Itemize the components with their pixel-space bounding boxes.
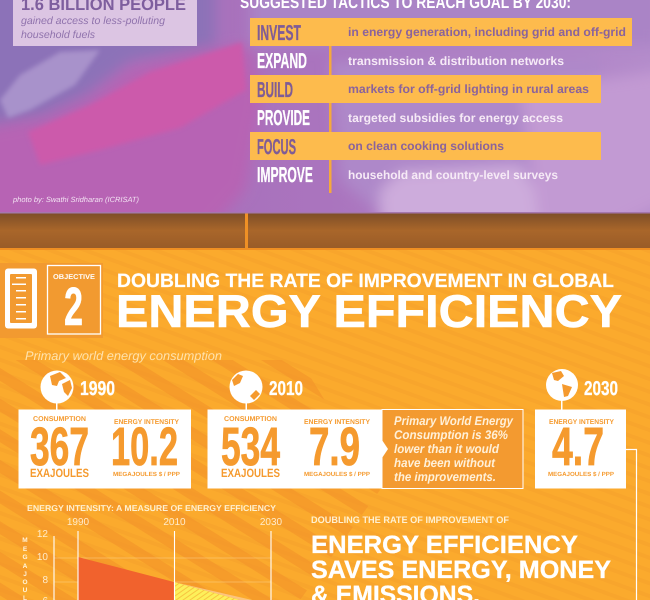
heading: objective title: ENERGY EFFICIENCY bbox=[116, 285, 622, 337]
tactic: improve: household and country-level surveys bbox=[348, 168, 558, 182]
panel: 2030 bbox=[535, 369, 626, 488]
panel: 1.6 billion people callout bbox=[13, 0, 197, 46]
callout: 36 percent lower: Primary World Energy bbox=[394, 414, 514, 428]
tactic: build: BUILD bbox=[257, 78, 293, 102]
stat: consumption 367: 367 bbox=[30, 417, 89, 477]
y axis title: E bbox=[23, 546, 28, 553]
tactic: expand: transmission & distribution networks bbox=[348, 54, 564, 68]
heading: objective title: DOUBLING THE RATE OF IMPROVEMENT IN GLOBAL bbox=[117, 270, 614, 292]
tactic: focus: FOCUS bbox=[257, 135, 296, 159]
x axis years bbox=[67, 517, 283, 528]
panel: brown wood band bbox=[0, 212, 650, 248]
stat: consumption 534 bbox=[221, 416, 280, 480]
panel: objective badge bbox=[0, 263, 103, 338]
icon: globe 2030 bbox=[546, 369, 578, 410]
tactic: invest: in energy generation, including grid and off-grid bbox=[348, 25, 626, 39]
objective number frame bbox=[48, 266, 100, 337]
tactic: build: markets for off-grid lighting in rural areas bbox=[348, 82, 589, 96]
objective number frame: 2 bbox=[64, 277, 83, 337]
text block: efficiency saves: SAVES ENERGY, MONEY bbox=[311, 556, 611, 584]
y axis title: G bbox=[22, 554, 28, 561]
tactic: provide: PROVIDE bbox=[257, 106, 310, 130]
stat: consumption 367 bbox=[30, 416, 89, 480]
callout: 36 percent lower: Consumption is 36% bbox=[394, 428, 508, 442]
stat: intensity 4.7: ENERGY INTENSITY bbox=[549, 419, 614, 426]
icon: globe 2010 bbox=[230, 370, 262, 410]
callout: 36 percent lower: the improvements. bbox=[394, 470, 496, 484]
y axis ticks bbox=[37, 529, 48, 600]
text block: efficiency saves bbox=[311, 515, 611, 600]
y axis ticks: 8 bbox=[42, 575, 48, 586]
panel: 2010 bbox=[208, 370, 382, 488]
tactic: focus bbox=[250, 132, 601, 160]
chart title: ENERGY INTENSITY: A MEASURE OF ENERGY EFFICIENCY bbox=[27, 503, 276, 513]
tactic: expand bbox=[257, 49, 564, 73]
stat: consumption 367: EXAJOULES bbox=[30, 466, 89, 480]
y axis title: J bbox=[23, 571, 27, 578]
tactic: build bbox=[250, 75, 601, 103]
objective number frame: OBJECTIVE bbox=[53, 274, 95, 281]
panel: orange solar background bbox=[0, 248, 650, 600]
panel: 1990 bbox=[18, 370, 191, 488]
y axis title: A bbox=[23, 563, 28, 570]
area: projected intensity bbox=[174, 582, 240, 600]
stat: intensity 7.9: 7.9 bbox=[309, 417, 360, 477]
icon: globe 1990 bbox=[40, 370, 74, 410]
photo credit: photo by: Swathi Sridharan (ICRISAT) bbox=[12, 195, 139, 204]
panel: 2010: 2010 bbox=[269, 378, 303, 400]
tactic: focus: on clean cooking solutions bbox=[348, 139, 504, 153]
stat: intensity 7.9: ENERGY INTENSITY bbox=[304, 419, 370, 426]
stat: intensity 10.2 bbox=[111, 417, 180, 478]
tactic: invest: INVEST bbox=[257, 21, 301, 45]
stat: intensity 10.2: 10.2 bbox=[111, 417, 178, 477]
tactic: improve: IMPROVE bbox=[257, 163, 313, 187]
chart: energy intensity bbox=[22, 503, 283, 600]
panel: 2030: 2030 bbox=[584, 378, 618, 400]
x axis years: 2030 bbox=[260, 517, 283, 528]
tactic: provide bbox=[257, 106, 563, 130]
stat: consumption 534: 534 bbox=[221, 417, 280, 477]
y axis ticks: 12 bbox=[37, 529, 48, 540]
tactic: invest bbox=[250, 18, 632, 46]
y axis ticks: 10 bbox=[37, 552, 48, 563]
stat: intensity 4.7: 4.7 bbox=[552, 417, 604, 477]
x axis years: 1990 bbox=[67, 517, 90, 528]
callout: 36 percent lower bbox=[382, 410, 523, 488]
tactic: expand: EXPAND bbox=[257, 49, 307, 73]
panel: 1.6 billion people callout: gained access to less-polluting bbox=[21, 15, 165, 27]
y axis title: O bbox=[22, 579, 28, 586]
stat: consumption 534: EXAJOULES bbox=[221, 466, 280, 480]
text block: efficiency saves: DOUBLING THE RATE OF IMPROVEMENT OF bbox=[311, 515, 509, 526]
stat: intensity 10.2: MEGAJOULES $ / PPP bbox=[113, 471, 180, 478]
tactic: provide: targeted subsidies for energy access bbox=[348, 111, 563, 125]
panel: 1.6 billion people callout: household fuels bbox=[21, 29, 96, 41]
x axis years: 2010 bbox=[163, 517, 186, 528]
subheading: primary world energy consumption: Primary world energy consumption bbox=[25, 349, 222, 363]
panel: purple photo background bbox=[0, 0, 650, 230]
icon: energy gauge bbox=[5, 268, 37, 328]
callout: 36 percent lower: lower than it would bbox=[394, 442, 499, 456]
text block: efficiency saves: ENERGY EFFICIENCY bbox=[311, 531, 578, 559]
connector line from 2030 bbox=[626, 450, 636, 600]
tactic: improve bbox=[257, 163, 558, 187]
y axis title: M bbox=[22, 537, 28, 544]
y axis title bbox=[22, 537, 28, 600]
panel: tactics list bbox=[250, 18, 632, 193]
stat: consumption 367: CONSUMPTION bbox=[33, 416, 86, 423]
panel: 1990: 1990 bbox=[80, 378, 115, 400]
stat: intensity 4.7: MEGAJOULES $ / PPP bbox=[548, 471, 614, 478]
stat: intensity 7.9: MEGAJOULES $ / PPP bbox=[304, 471, 370, 478]
stat: intensity 10.2: ENERGY INTENSITY bbox=[114, 419, 179, 426]
area: actual intensity bbox=[78, 557, 174, 600]
callout: 36 percent lower: have been without bbox=[394, 456, 496, 470]
y axis title: U bbox=[23, 587, 28, 594]
stat: consumption 534: CONSUMPTION bbox=[224, 416, 277, 423]
